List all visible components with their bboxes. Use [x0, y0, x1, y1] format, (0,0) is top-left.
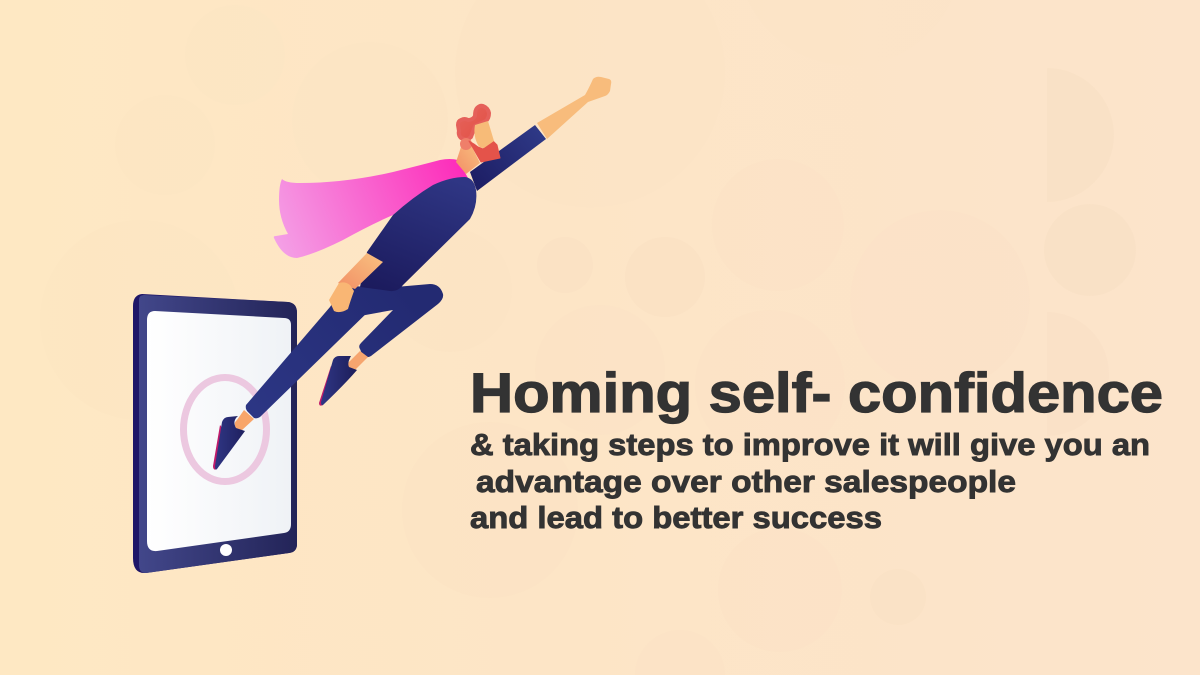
back shoe sole	[319, 366, 334, 406]
neck	[456, 141, 480, 174]
back leg	[359, 284, 443, 357]
target ring	[184, 378, 266, 482]
tablet screen	[147, 311, 291, 551]
back shoe	[321, 356, 357, 405]
hand	[329, 282, 354, 312]
line 2: advantage over other salespeople	[476, 464, 1016, 499]
front ankle	[235, 410, 254, 431]
sleeve	[470, 125, 546, 191]
forearm	[338, 253, 383, 289]
front shoe sole	[213, 425, 224, 470]
tablet home button	[220, 544, 232, 556]
front leg	[246, 285, 395, 418]
line 1: & taking steps to improve it will give you an	[470, 427, 1150, 462]
ear	[460, 138, 472, 150]
torso	[360, 177, 476, 291]
front shoe	[215, 416, 245, 470]
hair	[458, 106, 489, 140]
line 3: and lead to better success	[470, 500, 882, 535]
icon: tablet	[133, 294, 297, 573]
beard	[469, 141, 500, 162]
cape	[274, 159, 468, 258]
superhero figure	[213, 77, 611, 470]
body text	[470, 427, 1150, 535]
title: Homing self- confidence	[470, 361, 1163, 424]
face	[474, 121, 494, 148]
back ankle	[348, 351, 368, 371]
raised arm	[537, 77, 611, 139]
